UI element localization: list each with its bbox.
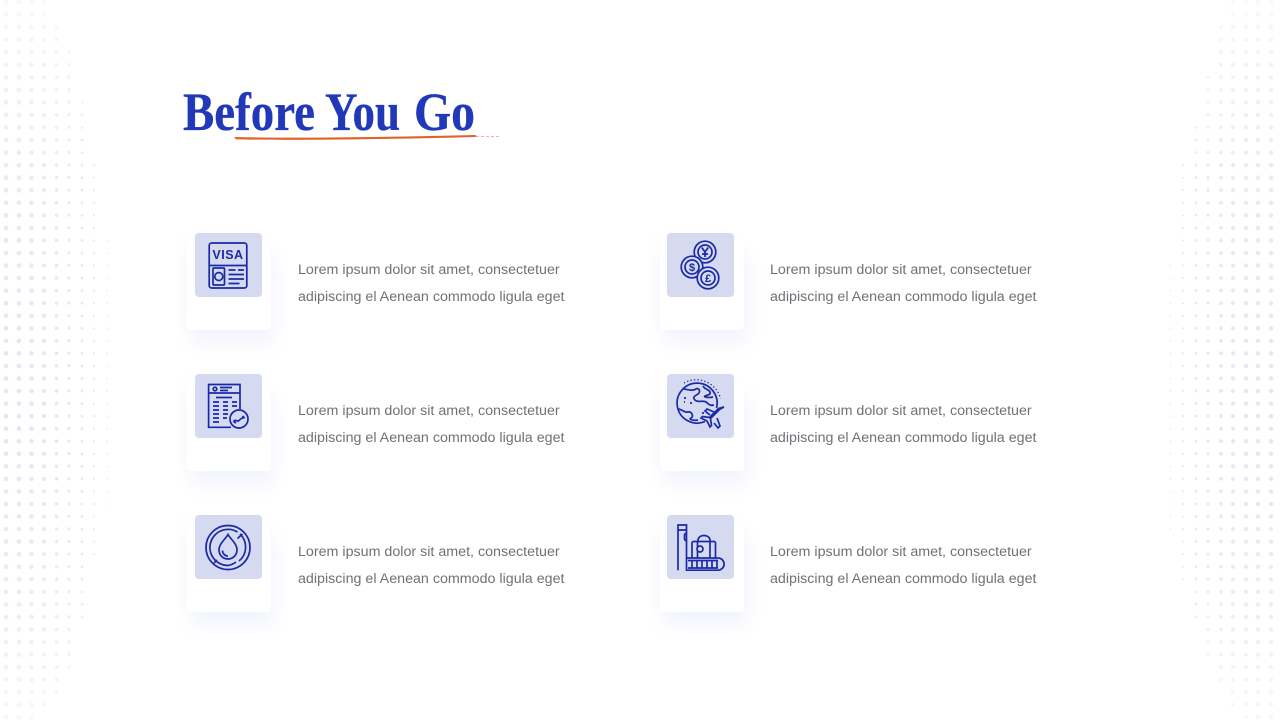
icon: visa document: VISA [212,248,244,262]
text block 3: Lorem ipsum dolor sit amet, consectetuer [298,403,560,419]
icon: coins: $ [689,262,695,274]
text block 3 [298,403,564,446]
text block 2: adipiscing el Aenean commodo ligula eget [770,288,1036,304]
text block 4: adipiscing el Aenean commodo ligula eget [770,430,1036,446]
icon tile: water [194,515,262,579]
item 5: no water [194,515,564,621]
title: Before You Go: Go [414,82,475,142]
text block 2 [770,262,1036,304]
text block 6 [770,544,1036,586]
text block 5: adipiscing el Aenean commodo ligula eget [298,570,564,586]
text block 5: Lorem ipsum dolor sit amet, consectetuer [298,544,560,560]
title: Before You Go: You [325,82,400,142]
text block 6: Lorem ipsum dolor sit amet, consectetuer [770,544,1032,560]
text block 2: Lorem ipsum dolor sit amet, consectetuer [770,262,1032,278]
icon tile: visa [194,233,262,297]
text block 1: adipiscing el Aenean commodo ligula eget [298,288,564,304]
icon tile: baggage [667,515,734,579]
text block 3: adipiscing el Aenean commodo ligula eget [298,430,564,446]
card shadow panel [187,522,271,612]
title: Before You Go [183,82,475,142]
card shadow panel [660,522,744,612]
card shadow panel [187,381,271,471]
icon tile: globe [667,374,734,438]
text block 5 [298,544,564,586]
card shadow panel [660,240,744,330]
item 6: baggage [667,515,1036,621]
card shadow panel [660,381,744,471]
item 4: globe [667,374,1036,480]
item 2: currency [667,233,1036,339]
text block 1 [298,262,564,304]
card shadow panel [187,240,271,330]
icon tile: coins [667,233,734,297]
title: Before You Go: Before [183,82,315,142]
title underline brush stroke [234,135,499,140]
icon tile: invoice [194,374,262,438]
text block 4: Lorem ipsum dolor sit amet, consectetuer [770,403,1032,419]
icon: coins: £ [705,273,711,285]
item 1: visa [194,233,564,339]
item 3: document [194,374,564,480]
text block 4 [770,403,1036,446]
text block 1: Lorem ipsum dolor sit amet, consectetuer [298,262,560,278]
text block 6: adipiscing el Aenean commodo ligula eget [770,570,1036,586]
